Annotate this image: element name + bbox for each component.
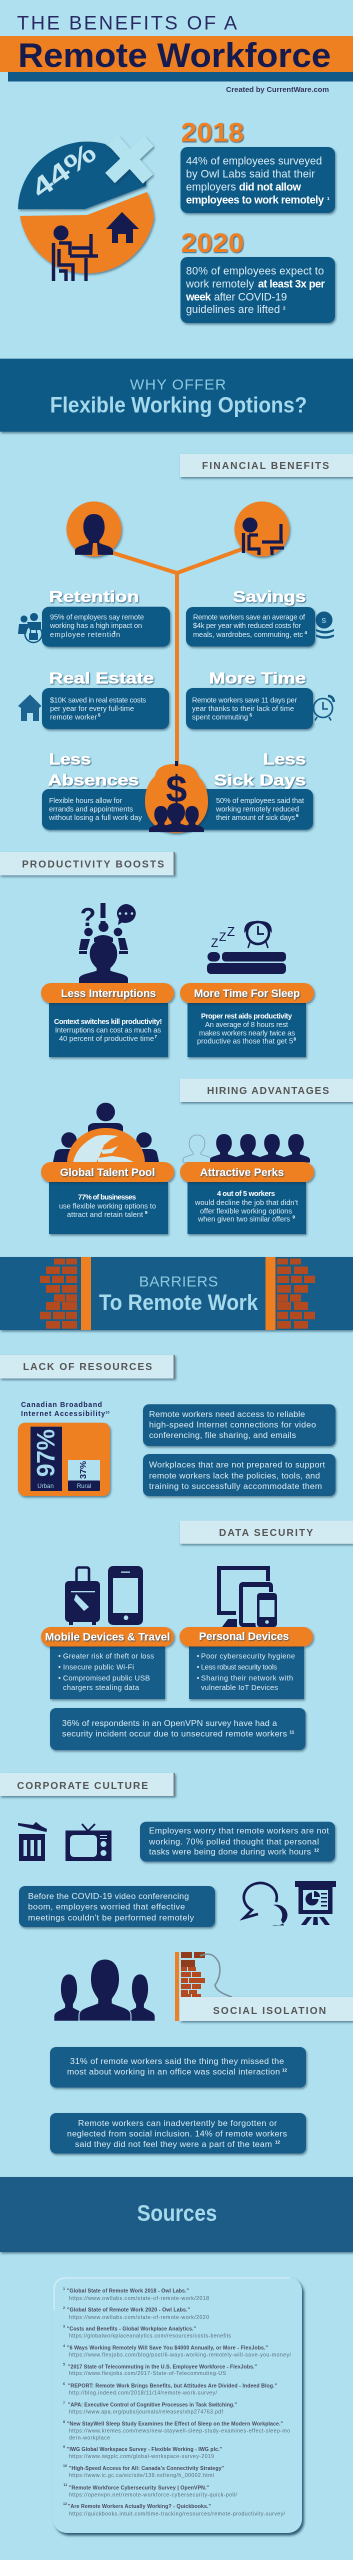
panel: sources list: 10 [63,2464,67,2468]
heading: less sick days: Sick Days [214,772,306,789]
panel: internet access: conferencing, file sharing, and emails [149,1430,296,1440]
panel: social interaction stat: 31% of remote workers said the thing they missed the [70,2056,284,2066]
card: less interruptions: Less Interruptions [61,988,156,1000]
heading: less absences: Less [49,752,91,769]
panel: workplace readiness [143,1454,336,1496]
title orange band [0,36,353,72]
panel: social inclusion stat: 12 [275,2140,281,2144]
section label: social isolation: SOCIAL ISOLATION [213,2006,326,2017]
panel: sources list: https://globalworkplaceanalytics.com/resources/costs-benefits [69,2334,231,2340]
card: less interruptions: 7 [154,1034,158,1039]
banner: barriers to remote work: To Remote Work [99,1290,259,1315]
card: personal devices: Poor cybersecurity hygiene [201,1652,295,1660]
icon: home [106,212,139,243]
card: more time for sleep: 8 [294,1036,296,1042]
panel: retention: 95% of employers say remote [50,612,144,622]
card: global talent pool: 9 [145,1210,148,1215]
circle lower segment [20,192,154,273]
panel: sources list: "High-Speed Access for All: Canada's Connectivity Strategy" [69,2466,225,2472]
icon: 44 percent split circle [18,137,154,281]
panel: sources list: 5 [63,2362,65,2366]
panel: internet access [143,1404,336,1446]
icon: sleep with alarm clock: Z [219,930,226,944]
section label: hiring advantages: HIRING ADVANTAGES [207,1086,329,1097]
panel: retention: employee retention [50,630,120,639]
panel: sources list: https://www.kremes.com/news/new-staywell-sleep-study-examines-effect-sleep-mo [69,2428,290,2434]
panel: openvpn stat: 11 [290,1730,295,1734]
icon: global team [53,1103,159,1163]
icon: right brick wall [277,1258,315,1329]
card: mobile devices and travel: Compromised public USB [63,1674,150,1682]
panel: internet access: Remote workers need access to reliable [149,1409,305,1419]
card: attractive perks: when given two similar offers [197,1214,290,1224]
year 2018: 2018 [181,118,244,148]
panel: sources list: "Global State of Remote Work 2020 - Owl Labs." [67,2307,191,2313]
panel: 2020 stat: after COVID-19 [214,291,287,303]
panel: 2020 stat: guidelines are lifted [186,304,280,316]
panel: social inclusion stat: said they did not feel they were a part of the team [75,2139,272,2149]
chart heading: Canadian Broadband [21,1402,102,1409]
rural bar: Rural [77,1484,91,1490]
panel: 2018 stat: 44% of employees surveyed [186,156,322,168]
panel: social interaction stat: most about working in an office was social interaction [67,2066,280,2076]
branching connector [110,548,245,775]
panel: personal tasks worry: tasks were being done during work hours [149,1847,311,1857]
card: attractive perks: 9 [292,1214,296,1220]
card: more time for sleep [180,983,314,1057]
urban bar: Urban [37,1484,54,1490]
panel: sources list: 11 [64,2483,67,2487]
panel: 2018 stat: employees to work remotely [186,194,324,206]
card: global talent pool: use flexible working options to [59,1202,156,1210]
panel: real estate: remote worker [50,712,98,722]
section label: lack of resources [0,1355,175,1378]
panel: more time [186,688,313,729]
panel: savings [186,607,315,646]
panel: 2020 stat: week [185,291,212,303]
panel: sources list: "Global State of Remote Work 2018 - Owl Labs." [67,2289,190,2295]
panel: sources list: "Are Remote Workers Actually Working? - Quickbooks." [68,2504,212,2510]
panel: sources list: "2017 State of Telecommuting in the U.S. Employee Workforce - FlexJobs." [68,2364,258,2370]
panel: sources list: https://www.iwgplc.com/global-workspace-survey-2019 [69,2454,214,2460]
panel: 2020 stat: 2 [283,306,286,310]
panel: 2020 stat: 80% of employees expect to [186,266,324,278]
panel: savings: $4k per year with reduced costs for [193,621,302,630]
heading: savings: Savings [233,589,306,606]
section label: social isolation [180,1997,353,2021]
card: personal devices: Less robust security tools [201,1662,277,1672]
card: attractive perks: offer flexible working options [200,1206,292,1216]
card: less interruptions: Context switches kill productivity! [54,1017,162,1026]
icon: coins [316,612,334,639]
chart heading [21,1402,109,1418]
title line one: THE BENEFITS OF A [17,12,237,34]
panel: more time: 5 [250,712,252,718]
card: mobile devices and travel: Mobile Devices & Travel [45,1632,170,1644]
section label: data security: DATA SECURITY [219,1528,313,1539]
panel: sources list [53,2277,302,2533]
panel: sources list: https://www.ic.gc.ca/eic/site/139.nsf/eng/h_00002.html [69,2473,214,2479]
title accent bar [8,72,353,82]
panel: sources list: 2 [63,2306,65,2310]
banner: barriers to remote work: BARRIERS [139,1274,218,1291]
heading: more time: More Time [209,671,306,688]
panel: personal tasks worry: working. 70% polled thought that personal [148,1836,319,1846]
panel: sources list: 8 [63,2420,65,2424]
panel: sources list: "IWG Global Workspace Survey - Flexible Working - IWG plc." [67,2447,223,2453]
panel: 2018 stat: did not allow [239,182,302,194]
panel: sources list: "6 Ways Working Remotely Will Save You $4000 Annually, or More - FlexJobs." [67,2346,269,2352]
card: mobile devices and travel: Insecure public Wi-Fi [63,1662,134,1672]
panel: sources list: 12 [63,2502,67,2506]
panel: 2018 stat [180,147,335,213]
panel: sources list: dern-workplace [69,2435,110,2441]
panel: personal tasks worry: Employers worry that remote workers are not [149,1826,330,1836]
panel: sources list: 3 [63,2324,65,2328]
year 2020: 2020 [181,228,244,258]
panel: sources list: "Costs and Benefits - Global Workplace Analytics." [67,2326,197,2332]
card: personal devices: vulnerable IoT Devices [201,1683,278,1692]
panel: social interaction stat [50,2047,306,2088]
icon: dollar and team badge: $ [166,769,187,811]
panel: absences and sick days: without losing a full work day [48,813,142,822]
icon: alarm clock [314,696,334,720]
panel: savings: meals, wardrobes, commuting, etc [193,630,303,639]
panel: sources list: http://blog.indeed.com/2018/11/14/remote-work-survey/ [69,2391,218,2397]
banner: why offer flexible working options: WHY OFFER [130,376,226,394]
panel: internet access: high-speed Internet connections for video [149,1420,316,1430]
panel: sources list: 1 [63,2287,65,2291]
panel: sources list: https://www.owllabs.com/state-of-remote-work/2018 [69,2296,209,2302]
section label: financial benefits: FINANCIAL BENEFITS [202,461,329,472]
icon: dollar and team badge [145,761,208,833]
bar chart: broadband access [18,1423,110,1496]
banner: sources [0,2177,353,2252]
card: mobile devices and travel: chargers stealing data [63,1683,140,1692]
section label: hiring advantages [180,1079,353,1102]
panel: sources list: https://quickbooks.intuit.com/time-tracking/resources/remote-productivity-survey/ [69,2511,286,2517]
heading: less sick days [214,752,306,789]
panel: sources list: 7 [63,2401,65,2405]
rural bar: 37% [79,1461,88,1479]
panel: more time: year thanks to their lack of time [192,704,294,713]
panel: social inclusion stat [50,2113,306,2154]
panel: retention [42,607,170,647]
panel: sources list: "REPORT: Remote Work Brings Benefits, but Attitudes Are Divided - Indeed Blog." [68,2384,278,2390]
panel: meetings worry: meetings couldn't be performed remotely [28,1912,195,1922]
card: global talent pool: attract and retain talent [67,1210,143,1219]
icon: interruptions [79,902,136,983]
banner: sources: Sources [137,2200,217,2226]
panel: sources list: https://www.owllabs.com/state-of-remote-work/2020 [69,2315,209,2321]
panel: sources list: https://www.flexjobs.com/2017-State-of-Telecommuting-US [69,2371,227,2377]
banner: barriers to remote work [0,1257,353,1330]
panel: absences and sick days: errands and appointments [49,804,133,814]
icon: person at desk [54,226,98,281]
panel: sources list: 6 [63,2382,65,2386]
card: more time for sleep: Proper rest aids productivity [201,1012,293,1020]
icon: people and lock [18,613,42,642]
heading: less absences: Absences [48,772,139,789]
icon: sleep with alarm clock: Z [227,924,235,939]
card: global talent pool: 77% of businesses [78,1192,136,1202]
section label: corporate culture: CORPORATE CULTURE [17,1781,148,1792]
panel: openvpn stat: 36% of respondents in an OpenVPN survey have had a [62,1718,277,1728]
card: personal devices: Sharing their network with [201,1674,293,1682]
icon: isolated worker behind wall [175,1952,232,2021]
icon: presentation board [295,1881,336,1925]
panel: social inclusion stat: Remote workers can inadvertently be forgotten or [78,2118,277,2128]
panel: sources list: https://openvpn.net/remote-workforce-cybersecurity-quick-poll/ [69,2492,238,2498]
icon: interruptions: ? [80,902,96,932]
panel: social interaction stat: 12 [282,2068,288,2072]
chart heading: 10 [106,1410,109,1414]
credit: Created by CurrentWare.com [226,87,329,94]
icon: sleep with alarm clock [207,922,286,974]
section label: lack of resources: LACK OF RESOURCES [23,1362,152,1373]
panel: workplace readiness: remote workers lack the policies, tools, and [149,1470,320,1480]
card: mobile devices and travel: Greater risk of theft or loss [63,1652,154,1660]
icon: personal devices [217,1566,278,1628]
panel: social inclusion stat: neglected from social inclusion. 14% of remote workers [67,2128,287,2138]
panel: retention: working has a high impact on [49,621,142,630]
panel: sources list: "New StayWell Sleep Study Examines the Effect of Sleep on the Modern Workplace." [67,2422,284,2428]
icon: cross [110,140,149,179]
card: less interruptions: Interruptions can cost as much as [55,1026,161,1034]
icon: television [66,1824,112,1861]
panel: sources list: 9 [63,2445,65,2449]
panel: absences and sick days: Flexible hours allow for [49,796,123,805]
icon: left brick wall [40,1258,77,1329]
panel: absences and sick days: 6 [296,813,299,818]
panel: absences and sick days [42,789,313,830]
panel: sources list: "Remote Workforce Cybersecurity Survey | OpenVPN." [69,2485,210,2491]
panel: workplace readiness: Workplaces that are not prepared to support [149,1460,326,1470]
urban bar [30,1427,62,1491]
panel: meetings worry: Before the COVID-19 video conferencing [28,1891,189,1901]
icon: coins: S [322,618,326,625]
banner: why offer flexible working options [0,359,353,432]
circle upper segment [18,142,146,209]
card: global talent pool: Global Talent Pool [60,1167,155,1179]
card: more time for sleep: More Time For Sleep [194,988,300,1000]
panel: retention: 3 [113,630,116,635]
card: less interruptions [41,983,174,1057]
panel: real estate: 5 [98,712,101,718]
section label: data security [180,1521,353,1544]
card: more time for sleep: An average of 8 hours rest [205,1020,288,1029]
heading: retention: Retention [49,589,139,606]
title line two: Remote Workforce [18,37,331,75]
icon: chat bubbles [244,1883,287,1926]
panel: 2018 stat: 1 [327,196,330,201]
title [0,12,353,82]
section label: corporate culture [0,1773,175,1796]
panel: sources list: "APA: Executive Control of Cognitive Processes in Task Switching." [68,2403,238,2409]
heading: less sick days: Less [263,752,306,769]
heading: less absences [48,752,139,789]
panel: more time: Remote workers save 11 days per [192,696,298,704]
panel: 2020 stat: at least 3x per [258,278,326,290]
section label: financial benefits [180,454,353,477]
chart heading: Internet Accessibility [21,1411,105,1418]
panel: real estate: per year for every full-time [50,704,134,713]
panel: absences and sick days: working remotely reduced [215,804,299,814]
card: less interruptions: 40 percent of productive time [59,1034,154,1043]
card: attractive perks: would decline the job that didn't [194,1198,298,1207]
panel: savings: 4 [304,630,308,635]
panel: real estate [42,688,169,729]
panel: absences and sick days: their amount of sick days [216,813,295,822]
rural bar [68,1460,100,1491]
panel: meetings worry: boom, employers worried that effective [28,1902,185,1912]
panel: sources list: 4 [63,2344,65,2348]
panel: personal tasks worry: 12 [314,1848,320,1852]
urban bar: 97% [32,1429,60,1477]
icon: trash can [18,1822,47,1861]
panel: more time: spent commuting [192,712,248,722]
panel: meetings worry [19,1886,215,1927]
card: more time for sleep: productive as those that get 5 [197,1036,293,1046]
panel: 2020 stat: work remotely [185,278,255,290]
card: attractive perks: Attractive Perks [200,1167,284,1179]
wall posts [81,1257,276,1330]
panel: workplace readiness: training to successfully accommodate them [149,1481,322,1491]
icon: sleep with alarm clock: Z [211,936,218,950]
card: more time for sleep: makes workers nearly twice as [199,1028,295,1038]
heading: real estate: Real Estate [49,671,154,688]
icon: smartphone [108,1566,143,1625]
card: attractive perks: 4 out of 5 workers [217,1189,275,1198]
icon: candidates row [183,1134,310,1163]
panel: savings: Remote workers save an average of [193,612,306,622]
card: personal devices: Personal Devices [199,1631,289,1643]
panel: 2020 stat [180,257,335,323]
icon: suitcase [65,1568,100,1625]
panel: openvpn stat [50,1708,306,1750]
banner: why offer flexible working options: Flexible Working Options? [50,393,307,418]
panel: 2018 stat: by Owl Labs said that their [186,168,315,180]
card: personal devices [180,1627,313,1699]
panel: openvpn stat: security incident occur due to unsecured remote workers [62,1729,287,1739]
panel: 2018 stat: employers [186,182,237,194]
panel: sources list: https://www.flexjobs.com/blog/post/6-ways-working-remotely-will-save-you-money/ [69,2353,292,2359]
card: global talent pool [41,1162,174,1234]
icon: house [18,694,42,721]
icon: group of people [54,1959,155,2021]
panel: sources list: https://www.apa.org/pubs/journals/releases/xhp274763.pdf [69,2410,224,2416]
panel: absences and sick days: 50% of employees said that [216,796,304,805]
icon: employee circle [66,502,122,556]
card: mobile devices and travel [41,1627,174,1699]
panel: personal tasks worry [140,1822,335,1862]
icon: remote worker circle [234,502,290,556]
panel: real estate: $10K saved in real estate costs [50,696,146,704]
44 percent label: 44% [26,137,102,204]
card: attractive perks [180,1162,314,1234]
section label: productivity boosts: PRODUCTIVITY BOOSTS [22,860,164,871]
section label: productivity boosts [0,852,175,875]
